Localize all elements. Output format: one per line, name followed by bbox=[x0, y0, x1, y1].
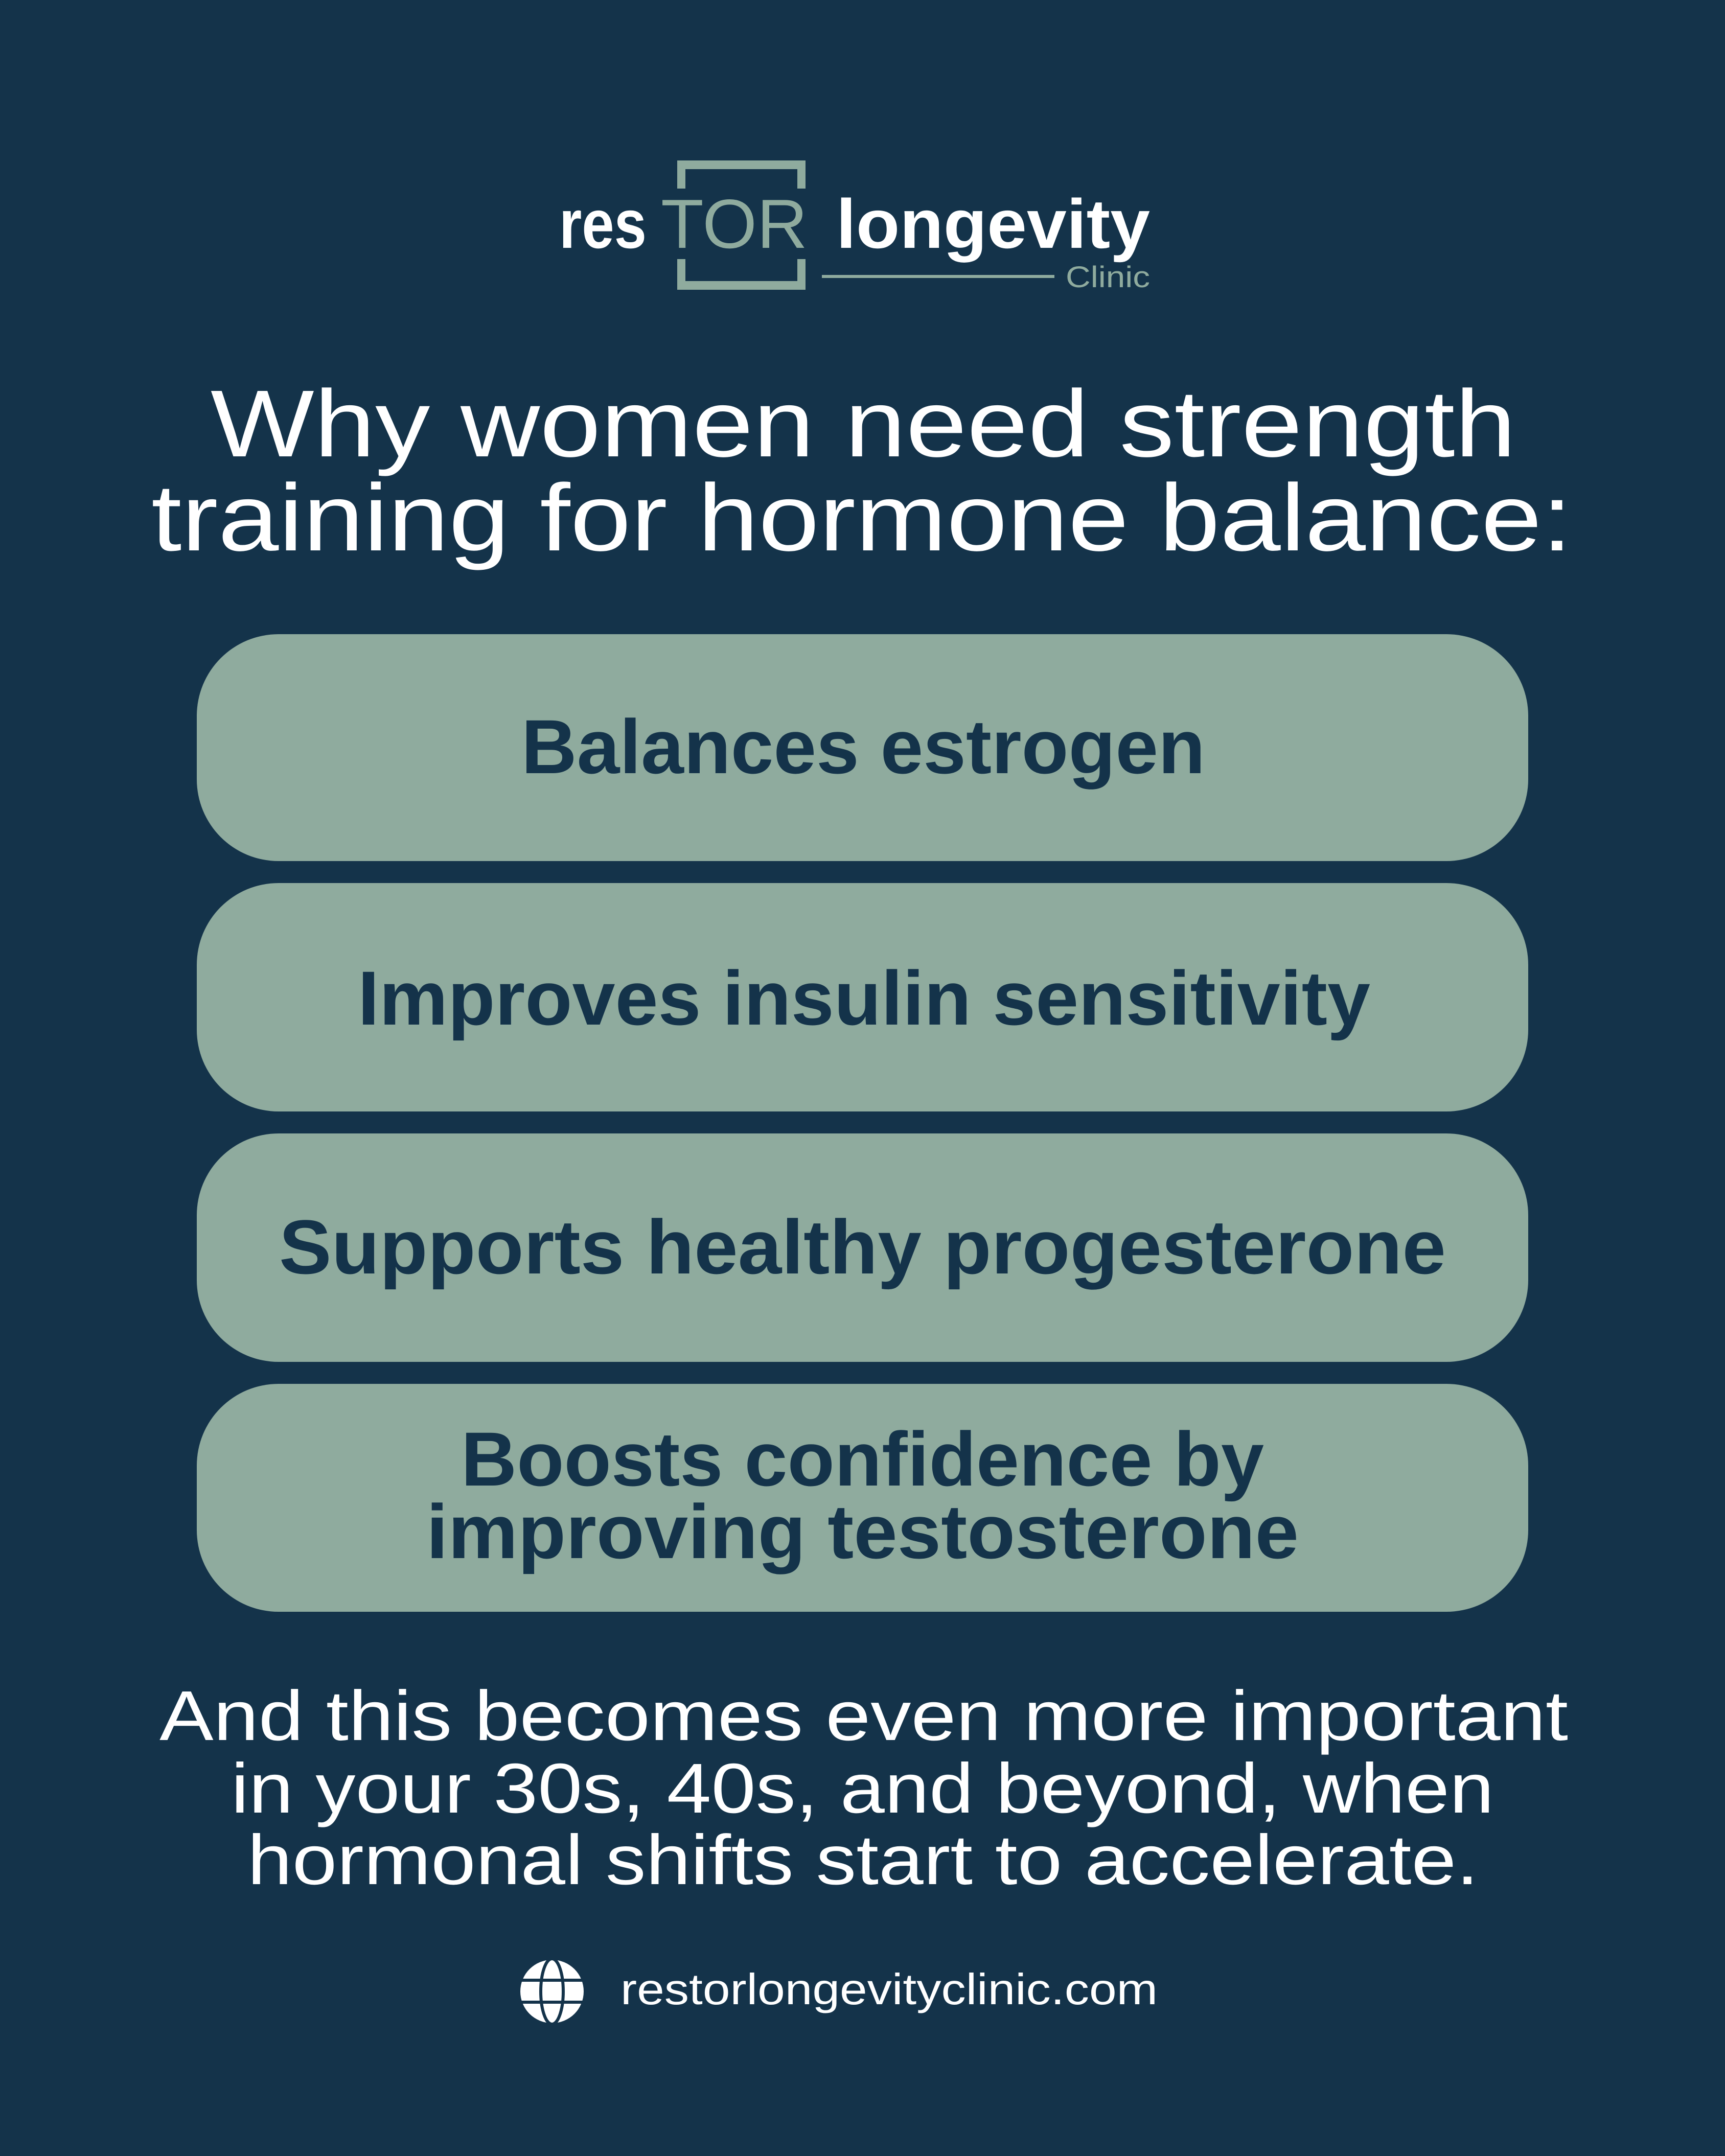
pill: boosts confidence: improving testosterone bbox=[426, 1489, 1299, 1574]
closing text: hormonal shifts start to accelerate. bbox=[247, 1821, 1479, 1899]
logo bbox=[559, 160, 1150, 294]
logo text Clinic: Clinic bbox=[1066, 261, 1150, 294]
closing text: in your 30s, 40s, and beyond, when bbox=[231, 1749, 1494, 1828]
title bbox=[151, 371, 1572, 571]
pill: balances estrogen bbox=[197, 634, 1528, 861]
logo line bbox=[822, 275, 1054, 278]
pill: balances estrogen: Balances estrogen bbox=[521, 704, 1205, 790]
pill: boosts confidence bbox=[197, 1384, 1528, 1612]
closing text bbox=[159, 1677, 1568, 1899]
pill: improves insulin sensitivity: Improves insulin sensitivity bbox=[358, 955, 1370, 1041]
website url: restorlongevityclinic.com bbox=[620, 1965, 1158, 2014]
logo text longevity: longevity bbox=[836, 185, 1150, 263]
pill: supports healthy progesterone bbox=[197, 1133, 1528, 1362]
pill: improves insulin sensitivity bbox=[197, 883, 1528, 1111]
title: training for hormone balance: bbox=[151, 465, 1572, 571]
pill: supports healthy progesterone: Supports healthy progesterone bbox=[279, 1204, 1446, 1290]
logo bracket bottom bbox=[677, 259, 806, 290]
logo bracket top bbox=[677, 160, 806, 189]
pill: boosts confidence: Boosts confidence by bbox=[461, 1416, 1264, 1502]
logo text res: res bbox=[559, 185, 647, 263]
title: Why women need strength bbox=[211, 371, 1516, 477]
closing text: And this becomes even more important bbox=[159, 1677, 1568, 1755]
icon: globe bbox=[519, 1959, 585, 2024]
logo text TOR: TOR bbox=[661, 185, 808, 263]
